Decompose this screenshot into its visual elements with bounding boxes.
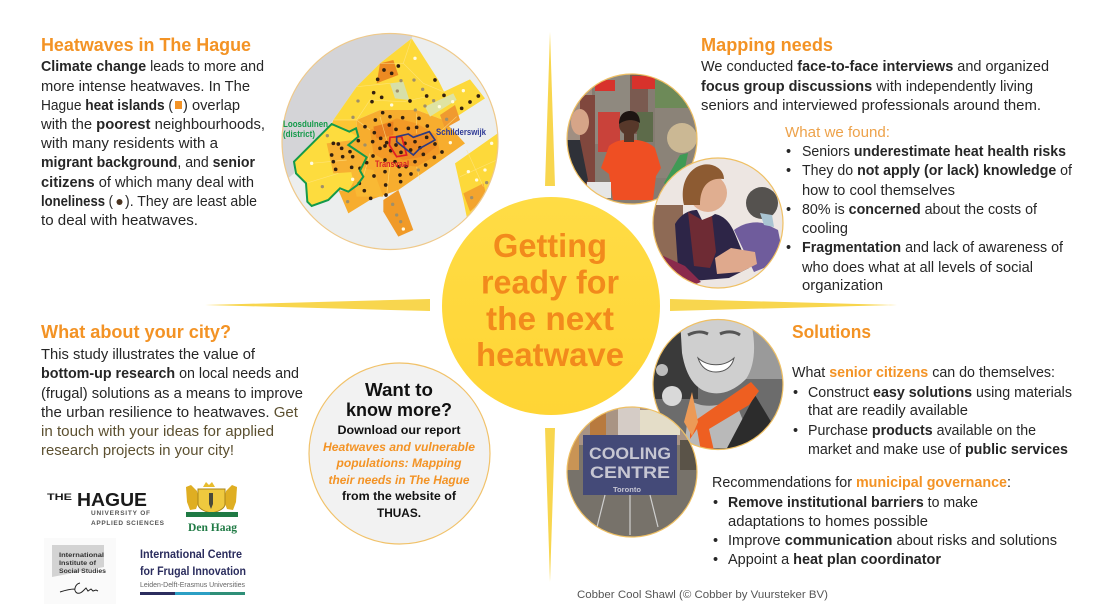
logo: International Institute of Social Studies: Institute of — [59, 560, 97, 567]
logo: International Institute of Social Studies: International — [59, 552, 104, 559]
text block: mapping needs intro: seniors and interviewed professionals around them. — [701, 98, 1041, 114]
logo: International Institute of Social Studies — [44, 538, 116, 604]
list: findings: 80% is concerned about the costs of — [802, 202, 1038, 218]
text block: heatwaves intro: more intense heatwaves. In The — [41, 79, 250, 95]
text block: what senior citizens can do: market and make use of public services — [808, 442, 1068, 458]
text block: what about your city: bottom-up research on local needs and — [41, 366, 299, 382]
logo: The Hague University of Applied Sciences: APPLIED SCIENCES — [91, 520, 165, 527]
text block: heatwaves intro: to deal with heatwaves. — [41, 213, 198, 229]
text block: what about your city: the urban resilience to heatwaves. Get — [41, 405, 298, 421]
logo: International Centre for Frugal Innovation — [140, 549, 246, 595]
map of The Hague: (district) — [283, 129, 315, 139]
central sun with title: Getting — [493, 227, 607, 264]
map of The Hague: Transvaal — [375, 159, 409, 170]
photo: cooling centre sign — [567, 407, 697, 537]
logo: The Hague University of Applied Sciences: THE — [47, 492, 72, 503]
text block: heatwaves intro: migrant background, and senior — [41, 155, 255, 171]
callout: want to know more: their needs in The Hague — [328, 473, 470, 487]
photo credit: Cobber Cool Shawl (© Cobber by Vuursteker BV) — [577, 589, 828, 601]
text block: what senior citizens can do: Construct easy solutions using materials — [808, 385, 1072, 401]
text block: mapping needs intro: We conducted face-to-face interviews and organized — [701, 59, 1049, 75]
text block: heatwaves intro: Hague heat islands ( — [41, 98, 173, 114]
central sun with title: heatwave — [476, 336, 624, 373]
text block: what senior citizens can do: What senior citizens can do themselves: — [792, 365, 1055, 381]
list: findings: • — [786, 202, 791, 218]
text block: what senior citizens can do — [792, 365, 1072, 458]
text block: what senior citizens can do: • — [793, 423, 798, 439]
logo: The Hague University of Applied Sciences — [47, 490, 165, 527]
callout: want to know more: know more? — [346, 400, 452, 420]
callout: want to know more: THUAS. — [377, 506, 421, 520]
logo: Den Haag: Den Haag — [188, 522, 237, 534]
list: findings: • — [786, 144, 791, 160]
callout: want to know more: Heatwaves and vulnerable — [323, 440, 475, 454]
text block: mapping needs intro — [701, 59, 1049, 114]
photo: interview on the street — [567, 74, 697, 204]
callout: want to know more: from the website of — [342, 489, 457, 503]
heading: Mapping needs: Mapping needs — [701, 35, 833, 55]
list: findings: organization — [802, 278, 883, 294]
text block: recommendations for municipal governance: Improve communication about risks and solutions — [728, 533, 1057, 549]
text block: heatwaves intro: ). They are least able — [125, 194, 257, 210]
text block: what about your city: in touch with your ideas for applied — [41, 424, 274, 440]
photo: cooling centre sign: COOLING — [589, 444, 671, 463]
list: findings: They do not apply (or lack) knowledge of — [802, 163, 1073, 179]
logo: International Centre for Frugal Innovation: International Centre — [140, 549, 242, 561]
text block: recommendations for municipal governance: • — [713, 533, 718, 549]
list: findings: • — [786, 163, 791, 179]
heading: Solutions: Solutions — [792, 322, 871, 342]
text block: recommendations for municipal governance: Recommendations for municipal governance: — [712, 475, 1011, 491]
text block: recommendations for municipal governance — [712, 475, 1057, 568]
map of The Hague: Schilderswijk — [436, 127, 487, 138]
logo: International Centre for Frugal Innovation: Leiden-Delft-Erasmus Universities — [140, 580, 245, 589]
text block: heatwaves intro: Climate change leads to more and — [41, 59, 264, 75]
text block: heatwaves intro: citizens of which many deal with — [41, 175, 254, 191]
list: findings: • — [786, 240, 791, 256]
text block: what about your city: This study illustrates the value of — [41, 347, 256, 363]
sun rays — [205, 32, 897, 582]
text block: recommendations for municipal governance: Appoint a heat plan coordinator — [728, 552, 941, 568]
logo: International Institute of Social Studies: Social Studies — [59, 568, 106, 575]
text block: recommendations for municipal governance: • — [713, 552, 718, 568]
callout: want to know more — [309, 363, 490, 544]
text block: heatwaves intro: with many residents with a — [40, 136, 219, 152]
callout: want to know more: Want to — [365, 380, 433, 400]
map of The Hague: Loosdulnen — [283, 119, 328, 130]
logo: The Hague University of Applied Sciences: HAGUE — [77, 490, 147, 510]
subheading: What we found: What we found: — [785, 125, 890, 141]
list: findings — [786, 144, 1073, 294]
photo: woman wearing cooling shawl — [653, 319, 783, 455]
callout: want to know more: Download our report — [338, 423, 460, 437]
list: findings: cooling — [802, 221, 848, 237]
text block: what senior citizens can do: Purchase products available on the — [808, 423, 1036, 439]
text block: mapping needs intro: focus group discussions with independently living — [701, 79, 1033, 95]
callout: want to know more: populations: Mapping — [335, 456, 462, 470]
central sun with title: ready for — [481, 264, 619, 300]
photo: focus group discussion — [653, 158, 784, 290]
logo: Den Haag — [186, 482, 238, 534]
map of The Hague — [270, 20, 500, 250]
photo: cooling centre sign: CENTRE — [590, 463, 670, 482]
list: findings: Fragmentation and lack of awareness of — [802, 240, 1064, 256]
text block: what senior citizens can do: • — [793, 385, 798, 401]
text block: recommendations for municipal governance: • — [713, 495, 718, 511]
text block: what about your city: (frugal) solutions as a means to improve — [41, 386, 303, 402]
text block: recommendations for municipal governance: adaptations to homes possible — [728, 514, 928, 530]
text block: heatwaves intro: ) overlap — [183, 98, 240, 114]
heading: Heatwaves in The Hague: Heatwaves in The Hague — [41, 35, 251, 55]
text block: heatwaves intro — [40, 59, 265, 229]
heading: What about your city?: What about your city? — [41, 322, 231, 342]
logo: International Centre for Frugal Innovation: for Frugal Innovation — [140, 566, 246, 578]
photo: cooling centre sign: Toronto — [613, 487, 641, 494]
list: findings: who does what at all levels of social — [801, 260, 1033, 276]
central sun with title: the next — [486, 300, 614, 337]
text block: what about your city — [41, 347, 303, 459]
logo: The Hague University of Applied Sciences: UNIVERSITY OF — [91, 510, 150, 517]
list: findings: Seniors underestimate heat health risks — [802, 144, 1066, 160]
central sun with title — [442, 197, 660, 415]
list: findings: how to cool themselves — [802, 183, 955, 199]
text block: recommendations for municipal governance: Remove institutional barriers to make — [728, 495, 978, 511]
text block: heatwaves intro: loneliness ( — [41, 194, 113, 210]
text block: what senior citizens can do: that are readily available — [808, 403, 968, 419]
text block: heatwaves intro: with the poorest neighbourhoods, — [40, 117, 265, 133]
text block: what about your city: research projects in your city! — [41, 443, 234, 459]
